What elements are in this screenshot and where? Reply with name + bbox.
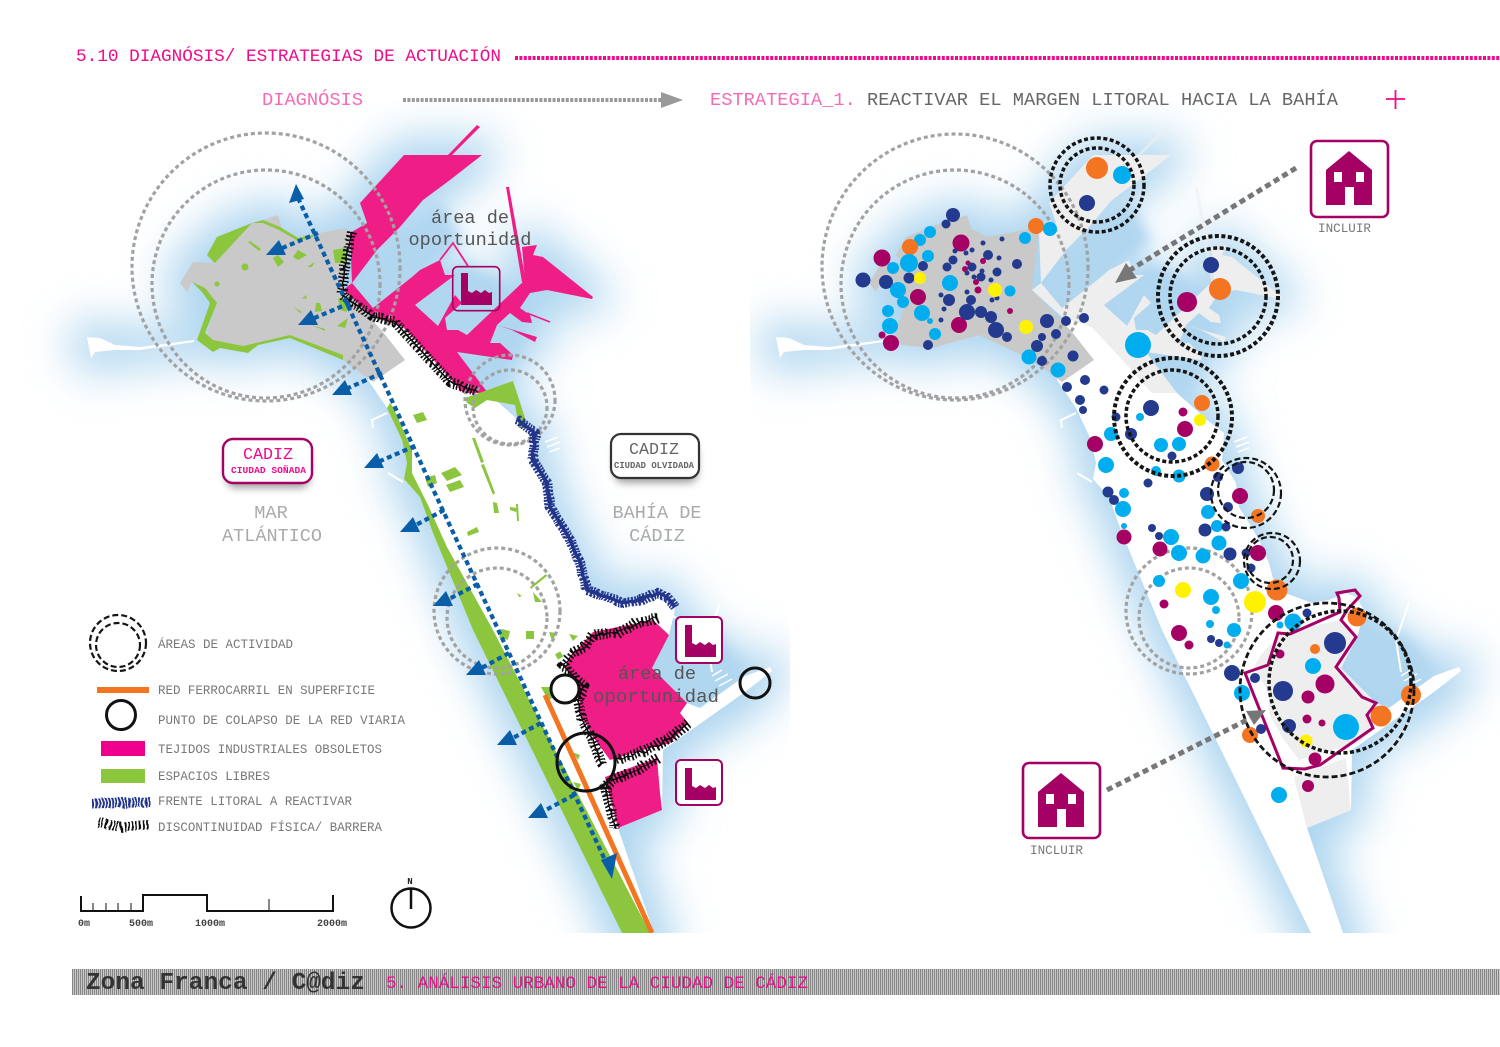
badge: forgotten city [611, 434, 699, 483]
legend: waterfront to reactivate: FRENTE LITORAL A REACTIVAR [158, 795, 352, 809]
label: include, south: INCLUIR [1030, 844, 1083, 858]
label: include, north: INCLUIR [1318, 222, 1371, 236]
piers, right map [1061, 413, 1421, 686]
sand spit, right map [776, 337, 883, 358]
transverse blue arrows [266, 233, 574, 818]
grey activity rings, right map [822, 134, 1252, 674]
pale harbour and industrial land [1032, 125, 1377, 828]
badge: forgotten city: CIUDAD OLVIDADA [614, 460, 694, 471]
legend: activity areas [90, 615, 293, 671]
badge: forgotten city: CADIZ [629, 441, 679, 460]
dots: north pier and harbour [1079, 157, 1231, 312]
scale bar: 2000m [317, 919, 347, 930]
icon: plus sign [1386, 90, 1405, 109]
collapse points [551, 668, 770, 791]
label: opportunity area south: área de [618, 664, 696, 685]
panel: strategy map [776, 125, 1461, 960]
page header title: 5.10 DIAGNÓSIS/ ESTRATEGIAS DE ACTUACIÓN [76, 45, 501, 67]
barrier lines in black [342, 232, 688, 828]
legend: obsolete industrial fabric [101, 741, 382, 757]
label: diagnosis: DIAGNÓSIS [262, 89, 363, 111]
north arrow: N [407, 877, 413, 887]
old town in grey [180, 215, 405, 382]
label: bay of Cadiz [614, 502, 700, 541]
dots: old town [856, 208, 1151, 378]
harbour water, right map [1079, 202, 1426, 666]
grey arrow: include, north [1115, 168, 1296, 283]
footer section title: 5. ANÁLISIS URBANO DE LA CIUDAD DE CÁDIZ [386, 972, 808, 994]
railway in orange [545, 695, 652, 933]
grey arrow: include, south [1107, 710, 1266, 790]
old town, right map [869, 215, 1094, 382]
footer project title: Zona Franca / C@diz [86, 970, 365, 997]
icon: factory, north harbour [453, 267, 500, 311]
scale bar: 1000m [195, 919, 225, 930]
legend [90, 615, 405, 835]
icon: factory, south [676, 760, 722, 805]
label: bay of Cadiz: BAHÍA DE [612, 502, 702, 524]
green open spaces [192, 220, 650, 933]
legend: open spaces [101, 769, 270, 784]
label: Atlantic ocean: ATLÁNTICO [222, 525, 322, 547]
footer band [72, 969, 1500, 997]
base map [776, 125, 1461, 960]
badge: dreamed city: CADIZ [243, 446, 293, 465]
dots: central strip [1062, 375, 1366, 650]
scale bar: 500m [129, 919, 153, 930]
label: opportunity area south: oportunidad [593, 687, 719, 708]
legend: surface railway: RED FERROCARRIL EN SUPERFICIE [158, 684, 375, 698]
sea glow around the coast [87, 155, 772, 960]
north arrow [392, 877, 430, 928]
legend: open spaces: ESPACIOS LIBRES [158, 770, 270, 784]
black activity rings, right map [1050, 138, 1414, 777]
badge: dreamed city [223, 439, 312, 488]
legend: physical barrier: DISCONTINUIDAD FÍSICA/ BARRERA [158, 820, 382, 835]
legend: road collapse point: PUNTO DE COLAPSO DE LA RED VIARIA [158, 714, 405, 728]
activity rings in grey [132, 133, 560, 674]
land, right map [1057, 317, 1461, 960]
label: opportunity area north: área de [431, 208, 509, 229]
magenta outline: area to include [1245, 590, 1376, 769]
label: opportunity area north: oportunidad [408, 230, 532, 251]
obsolete industrial fabric [343, 125, 688, 828]
icon: house, south [1023, 763, 1100, 838]
label: opportunity area south [593, 664, 719, 708]
label: opportunity area north [410, 210, 530, 249]
harbour water [390, 202, 737, 666]
icon: house, north [1311, 141, 1388, 217]
header dotted rule [515, 56, 1500, 60]
land: white strip [368, 317, 772, 960]
legend: road collapse point [106, 700, 405, 730]
icon: factory, port [676, 617, 722, 663]
port piers [372, 413, 732, 686]
legend: activity areas: ÁREAS DE ACTIVIDAD [158, 637, 293, 652]
dots: south zone [1224, 632, 1421, 803]
heading: strategy 1: ESTRATEGIA_1. REACTIVAR EL MARGEN LITORAL HACIA LA BAHÍA [710, 89, 1339, 111]
waterfront to reactivate in blue [518, 420, 675, 607]
label: Atlantic ocean: MAR [254, 503, 288, 524]
blue dotted axis arrow [289, 184, 617, 879]
land: sand spit [87, 337, 194, 358]
legend: obsolete industrial fabric: TEJIDOS INDUSTRIALES OBSOLETOS [158, 743, 382, 757]
badge: dreamed city: CIUDAD SOÑADA [231, 465, 306, 476]
panel: diagnosis map [87, 125, 772, 960]
scale bar [78, 895, 347, 930]
label: Atlantic ocean [222, 506, 321, 541]
scale bar: 0m [78, 919, 90, 930]
arrow: diagnosis to strategy [403, 92, 683, 108]
sea glow, right map [776, 155, 1461, 960]
label: bay of Cadiz: CÁDIZ [629, 525, 685, 547]
